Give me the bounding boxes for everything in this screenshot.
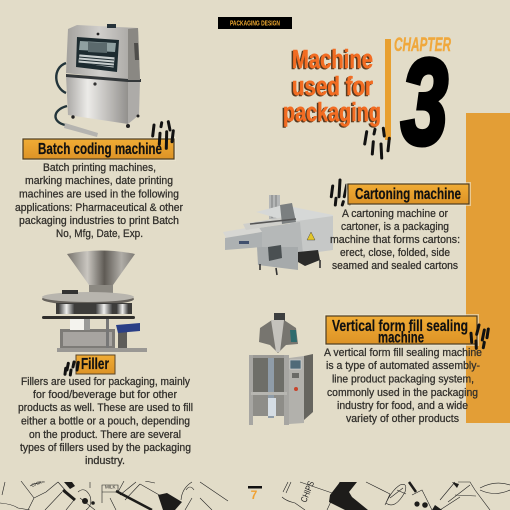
footer doodle: left: MILK — [105, 484, 116, 490]
orange side panel — [466, 113, 510, 423]
icon: filler machine — [42, 250, 147, 352]
text: filler description: either a bottle or a pouch, depending — [21, 416, 190, 428]
label: cartoning machine — [346, 182, 471, 206]
label: batch coding machine: Batch coding machine — [38, 141, 162, 158]
panel: filler — [18, 250, 193, 467]
label: vertical form fill sealing machine — [324, 314, 479, 346]
page number: 7 — [251, 488, 258, 502]
icon: cartoning dash marks — [331, 180, 352, 205]
label: vertical form fill sealing machine: machine — [378, 330, 424, 346]
text: batch coding description: machines are used in the following — [19, 188, 179, 200]
title: machine used for packaging: packaging — [283, 99, 381, 127]
icon: vertical form fill sealing machine — [249, 313, 313, 425]
footer doodle: left: CHIPS — [31, 479, 45, 488]
text: filler description: on the product. There are several — [29, 429, 181, 441]
text: cartoning description: cartoner, is a packaging — [341, 221, 449, 233]
title: machine used for packaging: Machine — [290, 47, 372, 75]
header tag: packaging design — [218, 17, 292, 29]
text: batch coding description: Batch printing machines, — [43, 162, 156, 174]
text: cartoning description — [330, 208, 460, 272]
footer doodle: left — [0, 479, 228, 510]
text: filler description: products as well. These are used to fill — [18, 402, 193, 414]
text: batch coding description: applications: Pharmaceutical & other — [15, 202, 183, 214]
footer doodle: right — [282, 480, 510, 510]
title: machine used for packaging: packaging — [282, 100, 380, 128]
text: vertical form description: A vertical form fill sealing machine — [324, 347, 482, 359]
label: vertical form fill sealing machine: Vertical form fill sealing — [332, 318, 468, 335]
chapter number 3: 3 — [401, 34, 448, 170]
text: filler description: types of fillers used by the packaging — [20, 442, 191, 454]
text: cartoning description: A cartoning machine or — [342, 208, 448, 220]
panel: vertical form fill sealing machine — [249, 313, 488, 425]
text: batch coding description: No, Mfg, Date, Exp. — [56, 228, 143, 240]
text: vertical form description: is a type of automated assembly- — [326, 360, 480, 372]
icon: cartoning machine — [223, 195, 333, 275]
icon: vertical form dash marks — [471, 325, 488, 348]
label: filler: Filler — [81, 356, 109, 373]
text: vertical form description: industry for food, and a wide — [337, 400, 468, 412]
title: machine used for packaging: used for — [290, 74, 372, 102]
title: machine used for packaging — [282, 46, 381, 128]
title: machine used for packaging: used for — [292, 73, 373, 101]
text: vertical form description: line product packaging system, — [332, 374, 474, 386]
header tag: packaging design: PACKAGING DESIGN — [230, 18, 280, 28]
text: vertical form description: variety of other products — [346, 413, 459, 425]
page number — [248, 486, 262, 502]
text: batch coding description: marking machines, date printing — [25, 175, 173, 187]
chapter label: CHAPTER — [394, 35, 451, 56]
icon: batch dash marks — [153, 122, 173, 148]
panel: cartoning machine — [223, 180, 471, 275]
label: cartoning machine: Cartoning machine — [355, 186, 461, 203]
icon: filler dash marks — [65, 362, 78, 375]
icon: title dash marks — [365, 128, 389, 158]
text: cartoning description: seamed and sealed cartons — [332, 260, 458, 272]
title divider bar — [385, 39, 391, 140]
label: batch coding machine — [21, 137, 176, 161]
icon: batch coding machine — [55, 24, 141, 137]
text: filler description: Fillers are used for packaging, mainly — [21, 376, 191, 388]
text: vertical form description — [324, 347, 482, 425]
text: filler description — [18, 376, 193, 467]
text: filler description: industry. — [85, 455, 125, 467]
footer doodle: right: CHIPS — [299, 480, 316, 504]
text: cartoning description: machine that forms cartons: — [330, 234, 460, 246]
title: machine used for packaging: Machine — [292, 46, 373, 74]
panel: batch coding machine — [15, 24, 183, 240]
text: vertical form description: commonly used in the packaging — [327, 387, 478, 399]
text: batch coding description — [15, 162, 183, 240]
text: filler description: for food/beverage but for other — [33, 389, 177, 401]
text: batch coding description: packaging industries to print Batch — [19, 215, 179, 227]
text: cartoning description: erect, close, folded, side — [340, 247, 450, 259]
